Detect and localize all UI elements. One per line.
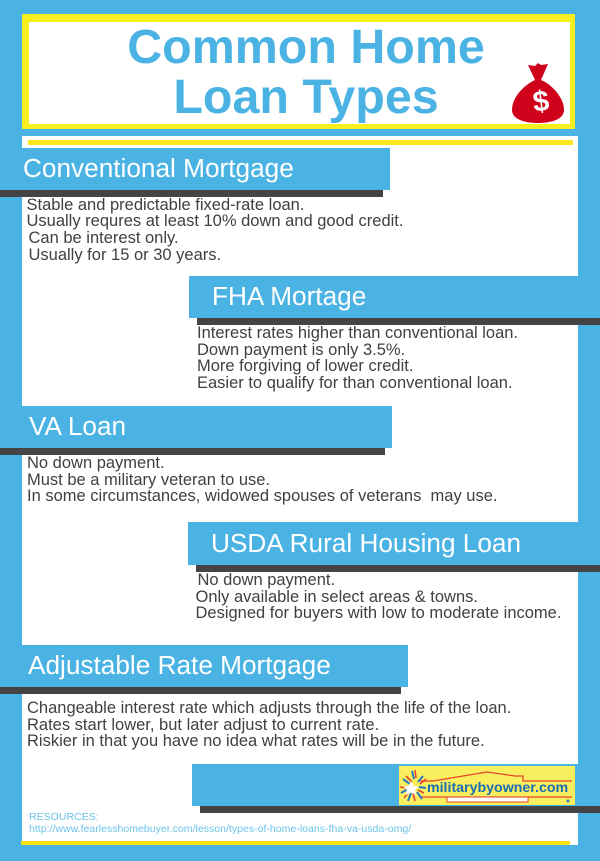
section: conventional mortgage: [0, 148, 403, 264]
title: Loan Types: [173, 70, 439, 124]
top yellow rule: [28, 140, 573, 145]
text block: [27, 699, 511, 750]
text block: Down payment is only 3.5%.: [197, 341, 405, 359]
text block: Changeable interest rate which adjusts through the life of the loan.: [27, 699, 511, 717]
logo wordmark: militarybyowner.com: [427, 780, 568, 796]
text block: Usually requres at least 10% down and good credit.: [26, 212, 403, 230]
resources: http://www.fearlesshomebuyer.com/lesson/types-of-home-loans-fha-va-usda-omg/: [29, 822, 411, 834]
text block: Usually for 15 or 30 years.: [28, 246, 221, 264]
heading: Conventional Mortgage: [23, 153, 294, 183]
text block: Interest rates higher than conventional loan.: [197, 324, 518, 342]
resources: [29, 811, 412, 834]
text block: Must be a military veteran to use.: [27, 471, 270, 489]
resources: RESOURCES:: [29, 811, 99, 823]
banner shadow bar: [0, 448, 385, 455]
text block: [196, 571, 561, 622]
icon: money bag: [512, 63, 564, 123]
logo house graphic: [400, 770, 572, 802]
text block: Designed for buyers with low to moderate income.: [196, 604, 561, 622]
banner shadow bar: [196, 565, 600, 572]
heading: VA Loan: [29, 411, 126, 441]
text block: Rates start lower, but later adjust to current rate.: [27, 716, 379, 734]
panel: content background: [22, 136, 578, 845]
title: [127, 20, 485, 124]
footer shadow bar: [200, 806, 600, 813]
logo: militarybyowner.com: [399, 766, 575, 805]
banner shadow bar: [0, 687, 401, 694]
footer banner: [192, 764, 578, 806]
section: USDA rural housing loan: [188, 522, 600, 622]
banner: [188, 522, 578, 565]
section: VA loan: [0, 406, 497, 505]
text block: Easier to qualify for than conventional loan.: [197, 374, 513, 392]
banner: [189, 276, 578, 318]
text block: More forgiving of lower credit.: [197, 357, 413, 375]
banner shadow bar: [197, 318, 600, 325]
banner shadow bar: [0, 190, 383, 197]
text block: Riskier in that you have no idea what rates will be in the future.: [27, 732, 485, 750]
section: adjustable rate mortgage: [0, 645, 511, 750]
text block: No down payment.: [198, 571, 335, 589]
text block: [27, 454, 497, 505]
bottom yellow rule: [21, 841, 570, 845]
section: FHA mortgage: [189, 276, 600, 392]
text block: Only available in select areas & towns.: [196, 588, 478, 606]
text block: [26, 196, 403, 264]
title: Common Home: [127, 20, 485, 74]
icon: money bag: $: [531, 85, 551, 119]
banner: [0, 645, 408, 687]
heading: FHA Mortage: [212, 281, 366, 311]
heading: USDA Rural Housing Loan: [211, 528, 521, 558]
text block: Can be interest only.: [28, 229, 179, 247]
text block: [197, 324, 518, 392]
text block: Stable and predictable fixed-rate loan.: [26, 196, 304, 214]
banner: [0, 406, 392, 448]
text block: In some circumstances, widowed spouses of veterans may use.: [27, 487, 497, 505]
heading: Adjustable Rate Mortgage: [28, 650, 331, 680]
text block: No down payment.: [27, 454, 165, 472]
banner: [0, 148, 390, 190]
title box: [22, 14, 575, 129]
